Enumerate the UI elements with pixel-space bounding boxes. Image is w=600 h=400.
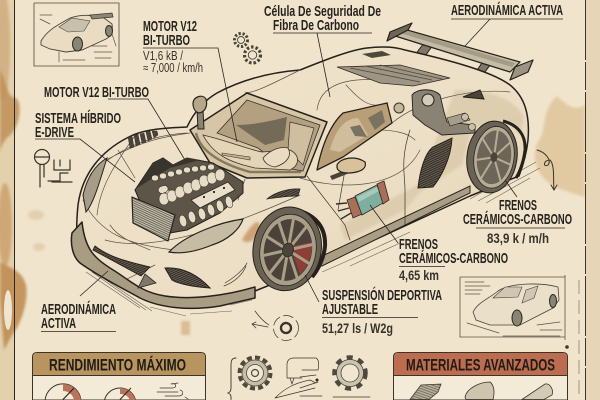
front fender vents (128, 131, 158, 148)
side mirror right (330, 158, 365, 180)
label: célula de seguridad: Fibra De Carbono (273, 17, 359, 34)
seats (288, 122, 314, 165)
label: aerodinámica front: ACTIVA (41, 315, 76, 332)
door line (307, 130, 410, 240)
left headlamp (83, 158, 107, 212)
rear small intake (463, 90, 484, 99)
label: sistema híbrido (35, 110, 121, 141)
body tone shading (340, 90, 524, 240)
label: aerodinámica front: AERODINÁMICA (41, 301, 116, 318)
icon: schematic symbol (34, 150, 72, 187)
turbo component (412, 90, 476, 135)
panel: materiales avanzados (394, 352, 568, 400)
rear side air intake (418, 138, 452, 188)
gauge one (45, 384, 81, 400)
label: sistema híbrido: SISTEMA HÍBRIDO (35, 110, 121, 127)
icon: airflow (157, 383, 188, 399)
dark seat shadow (236, 117, 287, 145)
gauge two (104, 388, 136, 400)
instrument binnacle (263, 147, 289, 167)
bracket (228, 358, 236, 400)
body crease lines (83, 70, 510, 280)
hybrid battery (336, 181, 389, 219)
leader lines (35, 19, 563, 302)
gear left (240, 358, 270, 388)
tube two (522, 384, 553, 400)
window seats (330, 103, 404, 152)
splitter fin (138, 274, 156, 288)
panel: rendimiento máximo (32, 352, 206, 400)
flow diagram (275, 358, 370, 398)
label: motor V12 top: MOTOR V12 (143, 18, 197, 35)
label: célula de seguridad (264, 3, 381, 34)
label: motor V12 top: V1,6 kB / (143, 49, 183, 63)
cowl band (196, 128, 318, 172)
front lower grille (93, 246, 150, 276)
windshield and cockpit (190, 93, 327, 178)
air intake (165, 268, 210, 288)
cockpit interior (217, 100, 320, 171)
label: motor V12 top: BI-TURBO (143, 32, 190, 49)
label: frenos right (463, 197, 572, 246)
label: frenos centre: FRENOS (399, 236, 438, 253)
sill (318, 186, 470, 266)
car body shell (77, 47, 528, 305)
label: suspensión (322, 286, 442, 336)
label: célula de seguridad: Célula De Seguridad De (264, 3, 381, 20)
dash slot (222, 153, 250, 160)
flow end dot (316, 378, 318, 382)
rear deck louvres (337, 51, 450, 86)
hood vent (267, 189, 300, 199)
label: frenos right: FRENOS (499, 197, 537, 214)
label: frenos centre (399, 236, 508, 283)
bottom-right blueprint thumbnail (460, 275, 565, 340)
icon: rotating gear diagram (252, 311, 298, 340)
label: frenos centre: CERÁMICOS-CARBONO (399, 250, 508, 267)
icon: squiggle arrow right (537, 150, 557, 190)
side mirror left (193, 96, 207, 129)
rust stains (242, 222, 259, 242)
side air blade (224, 263, 247, 286)
carbon sheet (410, 384, 441, 400)
label: frenos centre: 4,65 km (399, 268, 439, 283)
rear wing (387, 23, 533, 80)
label: suspensión: 51,27 ls / W2g (322, 321, 393, 336)
gear right (334, 358, 366, 388)
car (71, 23, 540, 316)
label: frenos right: 83,9 k / m/h (487, 231, 549, 246)
top-left blueprint thumbnail (34, 3, 119, 66)
label: motor V12 top (143, 18, 203, 75)
label: motor V12 top: ≈ 7,000 / km/h (143, 61, 203, 75)
panel heading: rendimiento: RENDIMIENTO MÁXIMO (49, 356, 186, 374)
ground hatching (86, 162, 540, 316)
label: aerodinámica front (41, 301, 116, 332)
engine (135, 158, 243, 233)
radiator (132, 197, 175, 241)
label: sistema híbrido: E-DRIVE (35, 124, 74, 141)
dashboard (203, 135, 298, 170)
icon: small double gears (234, 34, 260, 63)
front splitter (71, 222, 255, 308)
side window (317, 103, 392, 170)
label: motor V12 bi-turbo: MOTOR V12 BI-TURBO (44, 84, 149, 101)
rear wheel (462, 118, 525, 196)
label: suspensión: SUSPENSIÓN DEPORTIVA (322, 286, 442, 304)
front wheel (246, 202, 328, 296)
headlight (169, 219, 243, 253)
rear wing supports (408, 43, 490, 87)
centre icons (228, 358, 370, 400)
tube one (465, 382, 494, 400)
label: suspensión: AJUSTABLE (322, 301, 378, 318)
